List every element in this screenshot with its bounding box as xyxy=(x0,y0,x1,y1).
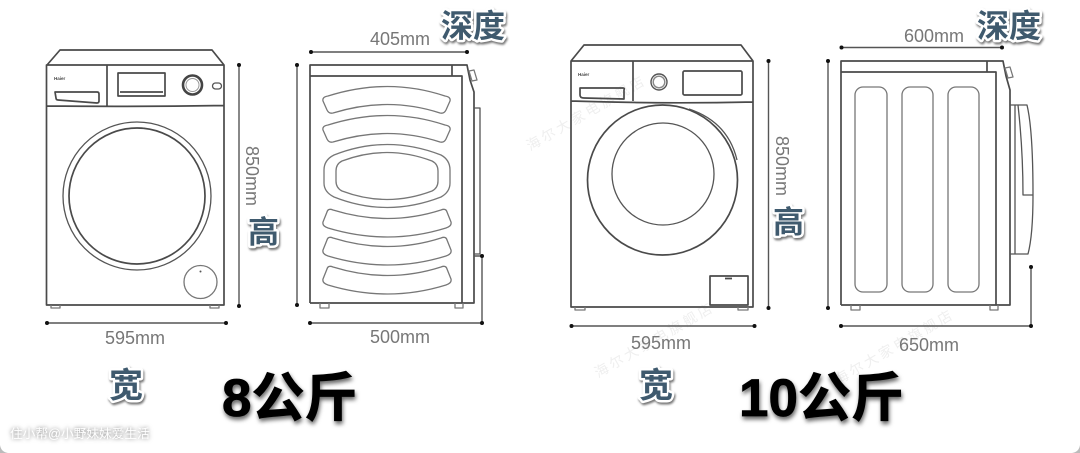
rear hose hook xyxy=(469,70,477,81)
label: 850mm height right: 850mm xyxy=(772,136,792,196)
door ring xyxy=(63,122,211,270)
label: 600mm depth right: 600mm xyxy=(904,26,964,46)
watermark: lower right: 海尔大家电旗舰店 xyxy=(832,306,957,388)
label: 405mm depth left: 405mm xyxy=(370,29,430,49)
label: 595mm width right: 595mm xyxy=(631,333,691,353)
side view: 10 kg washer xyxy=(841,61,1033,310)
tag: depth left: 深度 xyxy=(441,8,505,44)
tag: depth right: 深度 xyxy=(977,8,1041,44)
dimension lines: 8 kg xyxy=(45,50,484,325)
filter box xyxy=(710,276,748,305)
door xyxy=(588,105,738,255)
heading: 8 kg: 8公斤 xyxy=(222,369,357,428)
heading: 10 kg: 10公斤 xyxy=(739,369,904,428)
front view: 8 kg washer xyxy=(46,50,224,308)
small button xyxy=(212,83,222,89)
control knob xyxy=(651,74,667,90)
rear cover xyxy=(474,108,480,254)
side cabinet outline xyxy=(841,61,1010,305)
side view: 8 kg washer xyxy=(310,65,480,308)
feet xyxy=(575,307,748,310)
door profile xyxy=(1010,105,1033,254)
dimension lines: 10 kg xyxy=(570,46,1033,328)
watermark: upper: 海尔大家电旗舰店 xyxy=(524,72,649,154)
detergent drawer xyxy=(55,92,99,103)
tag: height right: 高 xyxy=(773,205,804,240)
rounded corner: bottom right xyxy=(1072,445,1080,453)
display panel xyxy=(683,71,742,95)
rounded corner: bottom left xyxy=(0,445,8,453)
brand label: Haier xyxy=(54,76,66,81)
side cabinet outline xyxy=(310,65,474,303)
tag: width right: 宽 xyxy=(639,367,673,405)
front view: 10 kg washer xyxy=(571,45,753,310)
brand label: Haier xyxy=(578,72,590,77)
label: 850mm height left: 850mm xyxy=(242,146,262,206)
rear hose hook xyxy=(1005,67,1013,78)
watermark: lower middle: 海尔大家电旗舰店 xyxy=(592,299,717,381)
detergent drawer xyxy=(580,88,624,99)
display panel xyxy=(118,73,165,96)
feet xyxy=(851,305,998,310)
tag: height left: 高 xyxy=(248,215,279,250)
control knob xyxy=(183,76,202,94)
tag: width left: 宽 xyxy=(109,367,143,405)
feet xyxy=(51,305,219,308)
label: 595mm width left: 595mm xyxy=(105,328,165,348)
source signature: 住小帮@小野妹妹爱生活 xyxy=(10,427,150,441)
label: 650mm right: 650mm xyxy=(899,335,959,355)
filter cap xyxy=(184,266,217,298)
side ribs xyxy=(855,87,979,292)
washer body outline xyxy=(571,45,753,307)
side ribs xyxy=(323,86,451,294)
label: 500mm left: 500mm xyxy=(370,327,430,347)
feet xyxy=(320,303,463,308)
washer body outline xyxy=(46,50,224,305)
